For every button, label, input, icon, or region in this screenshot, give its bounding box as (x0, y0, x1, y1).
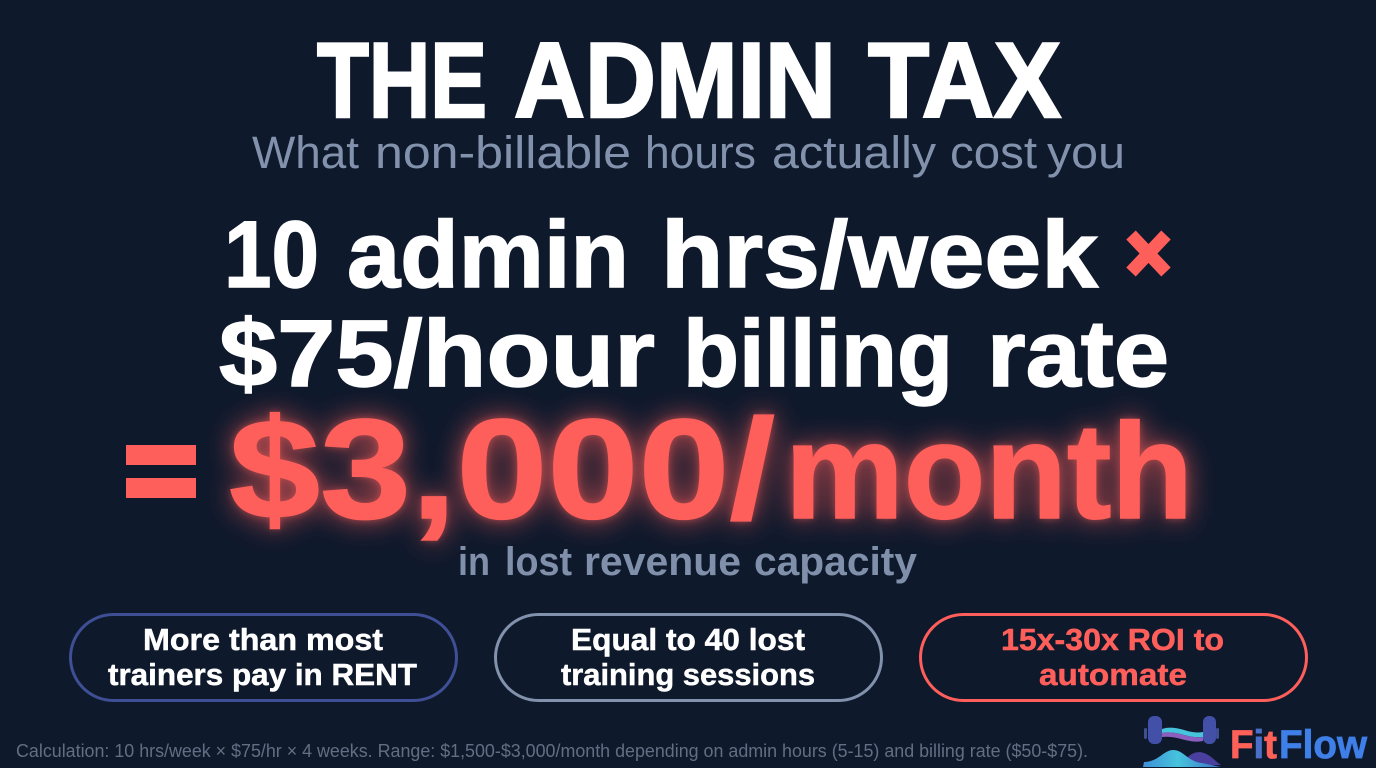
panel: rent comparison pill: More than most (143, 622, 383, 657)
result: equals sign (126, 445, 196, 498)
subtitle: cost (950, 127, 1038, 178)
equation line 2: $75/hour (219, 301, 655, 407)
equation line 2 (219, 301, 1169, 407)
equation line 1: admin (347, 202, 629, 308)
subtitle: What (252, 127, 360, 178)
subtitle (252, 127, 1125, 178)
equation line 1: hrs/week (661, 202, 1098, 308)
result caption: lost (505, 540, 572, 584)
title: TAX (868, 20, 1061, 140)
panel: ROI pill: automate (1039, 657, 1187, 692)
logo wordmark (1230, 723, 1368, 767)
logo wordmark: Flow (1279, 723, 1368, 767)
result caption: revenue (584, 540, 741, 584)
logo: FitFlow (1143, 716, 1368, 767)
subtitle: you (1047, 127, 1125, 178)
equation line 2: billing (683, 301, 953, 407)
title: ADMIN (514, 20, 836, 140)
subtitle: non-billable (375, 127, 631, 178)
equation line 2: rate (987, 301, 1169, 407)
result: monthly cost with glow: month (785, 395, 1193, 547)
icon: multiply sign (1131, 235, 1166, 272)
footnote: Calculation: 10 hrs/week × $75/hr × 4 weeks. Range: $1,500-$3,000/month depending on admin hours (5-15) and billing rate ($50-$75). (16, 741, 1088, 761)
panel: ROI pill: 15x-30x ROI to (1001, 622, 1224, 657)
title: THE (317, 20, 487, 140)
result caption (458, 540, 918, 584)
equation line 1: 10 (224, 202, 319, 308)
result caption: in (458, 540, 490, 584)
result caption: capacity (754, 540, 918, 584)
result: monthly cost with glow: $3,000/ (229, 390, 775, 549)
logo wordmark: Fit (1230, 723, 1277, 767)
equation line 1 (224, 202, 1166, 308)
result: monthly cost with glow: $3,000/ (229, 390, 775, 549)
icon: dumbbell with waves (1143, 716, 1221, 767)
result: monthly cost with glow: month (785, 395, 1193, 547)
title (317, 20, 1061, 140)
panel: rent comparison pill: trainers pay in RENT (108, 657, 417, 692)
result: monthly cost with glow (229, 390, 1193, 549)
subtitle: actually (772, 127, 937, 178)
panel: training sessions pill: training sessions (561, 657, 815, 692)
result: monthly cost with glow: $3,000/ (229, 390, 775, 549)
subtitle: hours (645, 127, 756, 178)
panel: training sessions pill: Equal to 40 lost (571, 622, 805, 657)
panel: training sessions pill (496, 614, 882, 700)
panel: ROI pill (920, 614, 1306, 700)
panel: rent comparison pill (70, 614, 456, 700)
result: monthly cost with glow: month (785, 395, 1193, 547)
